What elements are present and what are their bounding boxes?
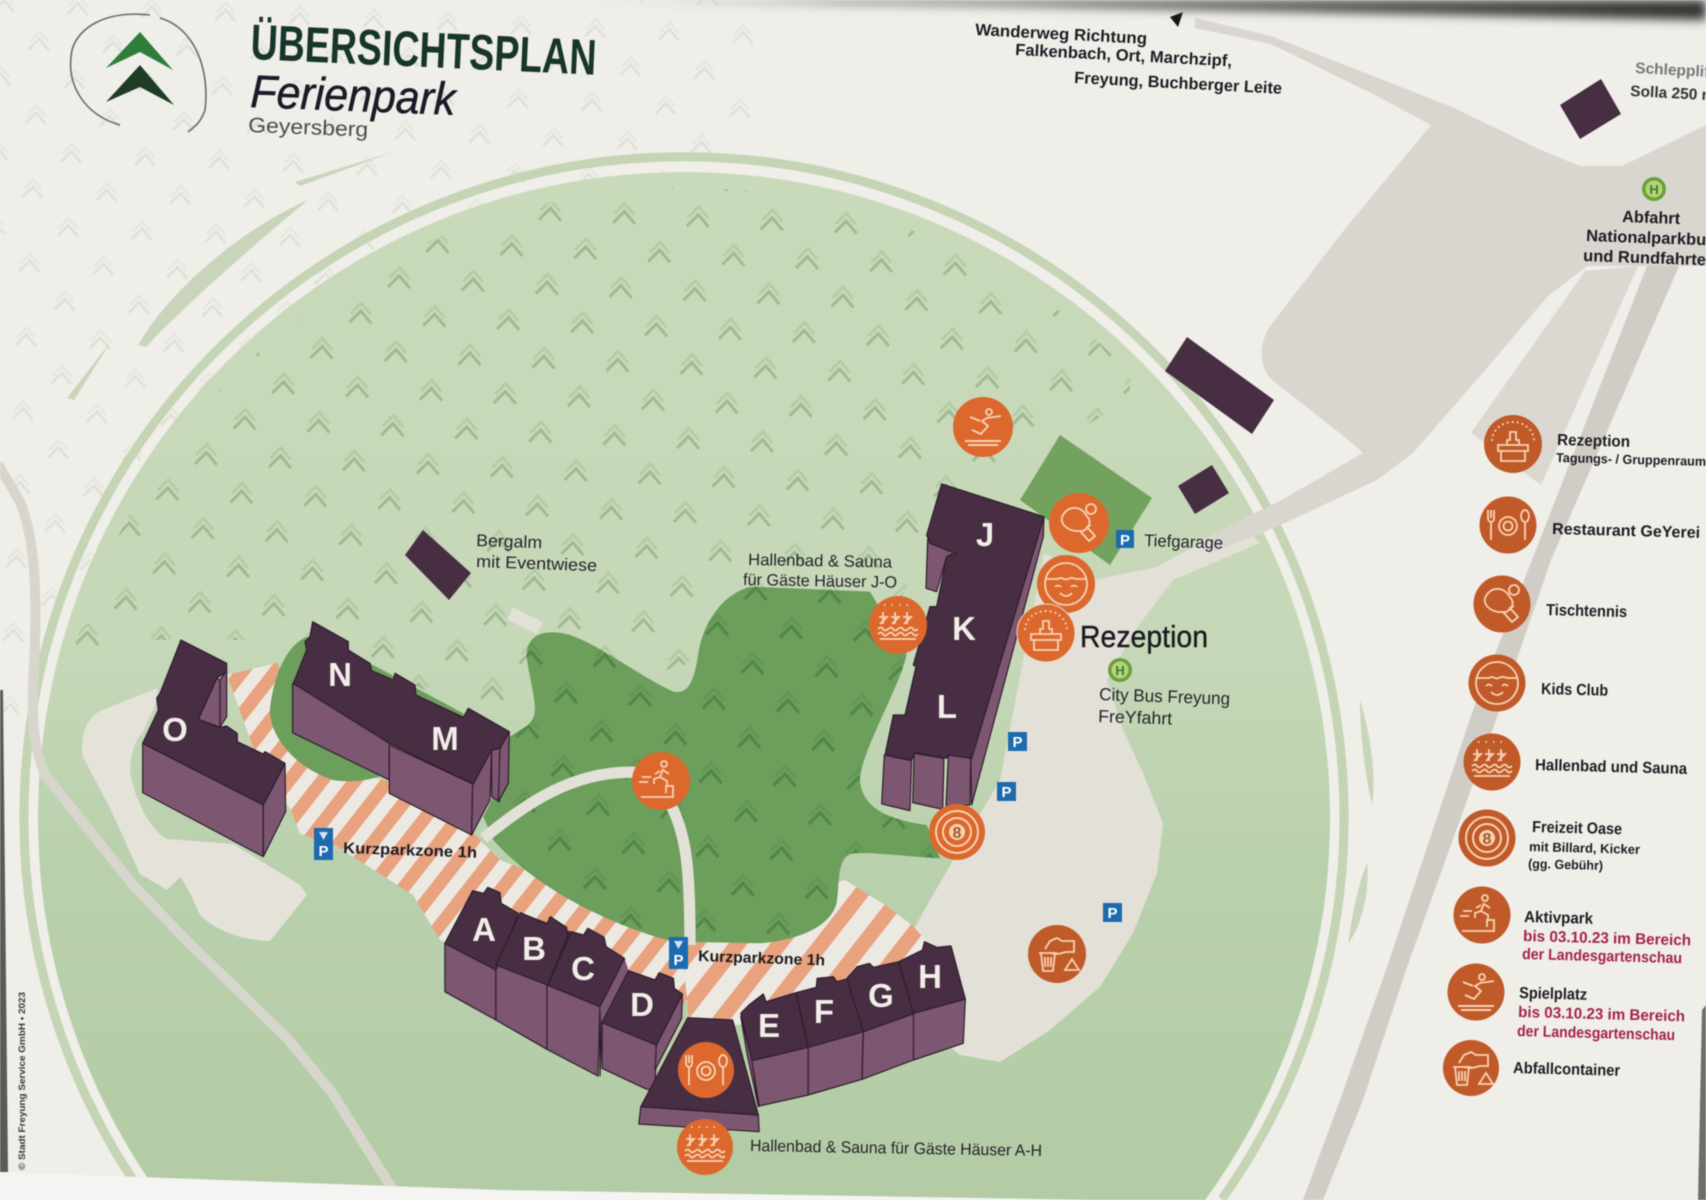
bus stop icon top bbox=[1642, 177, 1666, 201]
legend: Spielplatz: der Landesgartenschau bbox=[1517, 1023, 1675, 1044]
legend: Kids Club bbox=[1468, 654, 1609, 712]
logo bbox=[71, 14, 206, 132]
bus stop label bbox=[1583, 208, 1706, 270]
label: Bergalm: Bergalm bbox=[476, 531, 542, 552]
central meadow bbox=[483, 587, 940, 943]
icon: activity park bbox=[632, 752, 690, 810]
legend: Spielplatz: bis 03.10.23 im Bereich bbox=[1518, 1004, 1685, 1025]
icon: kids club bbox=[1037, 555, 1095, 613]
outbuilding north bbox=[1165, 337, 1274, 434]
legend: Freizeit Oase bbox=[1458, 810, 1640, 873]
parking sign 2: P bbox=[1012, 734, 1023, 751]
legend: Spielplatz: Spielplatz bbox=[1519, 985, 1587, 1004]
building letters: M bbox=[431, 720, 459, 757]
label: City Bus: City Bus Freyung bbox=[1099, 684, 1230, 709]
building letters: G bbox=[868, 977, 894, 1014]
short-term parking sign west: P bbox=[318, 843, 329, 860]
legend: Rezeption bbox=[1484, 415, 1706, 473]
map circle: outer ring bbox=[24, 157, 1344, 1199]
parking sign Tiefgarage: P bbox=[1120, 532, 1130, 549]
legend: Abfallcontainer: Abfallcontainer bbox=[1513, 1060, 1620, 1080]
parking sign 2 bbox=[1008, 732, 1027, 751]
parking sign Tiefgarage bbox=[1116, 530, 1134, 549]
parking sign 4 bbox=[1103, 903, 1122, 922]
label: Tiefgarage: Tiefgarage bbox=[1144, 531, 1223, 553]
outbuilding small bbox=[1178, 465, 1229, 514]
icon: billiard bbox=[929, 804, 985, 860]
map circle: green area bbox=[38, 172, 1330, 1200]
road: diagonal strip bbox=[1303, 266, 1679, 1200]
label: City Bus: FreYfahrt bbox=[1098, 706, 1173, 729]
outer tree pattern bbox=[0, 0, 760, 760]
green court behind N-M bbox=[270, 637, 463, 781]
label: Hallenbad A-H: Hallenbad & Sauna für Gäste Häuser A-H bbox=[750, 1137, 1042, 1160]
short-term parking sign west bbox=[314, 828, 333, 860]
bus stop icon: H bbox=[1115, 663, 1125, 678]
label: Kurzparkzone south: Kurzparkzone 1h bbox=[698, 948, 825, 969]
building letters: J bbox=[976, 516, 994, 553]
bus stop icon bbox=[1108, 658, 1132, 682]
Tiefgarage green bbox=[1020, 435, 1152, 565]
parking sign 3: P bbox=[1001, 784, 1012, 801]
label: Kurzparkzone west: Kurzparkzone 1h bbox=[343, 840, 477, 862]
legend: Aktivpark bbox=[1454, 886, 1691, 967]
hiking route label: Falkenbach, Ort, Marchzipf, bbox=[1015, 41, 1232, 70]
legend: Restaurant: Restaurant GeYerei bbox=[1552, 521, 1700, 542]
short-term parking sign south: P bbox=[673, 952, 684, 969]
building letters: N bbox=[328, 656, 352, 693]
parking hatch south bbox=[680, 880, 930, 1030]
photo edge: top bbox=[560, 0, 1706, 20]
legend panel bbox=[1443, 415, 1706, 1096]
bus stop icon top: H bbox=[1649, 182, 1659, 197]
icon: table tennis bbox=[1049, 493, 1109, 553]
paved area east with road bbox=[880, 522, 1260, 1062]
legend: Aktivpark: Aktivpark bbox=[1524, 909, 1593, 928]
building letters: D bbox=[630, 986, 654, 1023]
subtitle: Ferienpark bbox=[250, 65, 458, 125]
parking hatch west bbox=[227, 663, 690, 1030]
building letters: H bbox=[918, 958, 942, 995]
label: Bergalm bbox=[476, 531, 597, 575]
building letters: B bbox=[522, 930, 546, 967]
icon: playground bbox=[953, 397, 1013, 457]
legend: Spielplatz bbox=[1448, 964, 1685, 1044]
hiking route label bbox=[975, 21, 1282, 98]
photo edge: right bbox=[1698, 1005, 1706, 1200]
bottom paper edge bbox=[0, 1172, 1100, 1200]
hiking route label: Wanderweg Richtung bbox=[975, 21, 1147, 48]
legend: Tischtennis: Tischtennis bbox=[1546, 602, 1627, 621]
building letters: A bbox=[472, 911, 496, 948]
parking sign 4: P bbox=[1107, 905, 1118, 922]
building letters bbox=[162, 516, 994, 1044]
icon: reception bbox=[1017, 604, 1075, 662]
icon: pool south bbox=[677, 1119, 733, 1175]
road: car park and access road bbox=[1195, 18, 1706, 552]
label: Rezeption: Rezeption bbox=[1080, 619, 1208, 654]
label: Hallenbad J-O: für Gäste Häuser J-O bbox=[743, 571, 897, 592]
decorative brush strokes bbox=[67, 152, 1374, 944]
legend: Rezeption: Rezeption bbox=[1557, 432, 1630, 451]
legend: Freizeit Oase: 8 bbox=[1483, 831, 1492, 848]
building N-M bbox=[293, 622, 509, 835]
copyright note: © Stadt Freyung Service GmbH • 2023 bbox=[17, 992, 27, 1170]
building letters: F bbox=[814, 993, 834, 1030]
bus stop label: Abfahrt bbox=[1622, 208, 1681, 228]
short-term parking sign south bbox=[669, 937, 688, 969]
building letters: L bbox=[937, 688, 957, 725]
title: ÜBERSICHTSPLAN bbox=[250, 14, 598, 86]
legend: Hallenbad: Hallenbad und Sauna bbox=[1535, 757, 1687, 778]
ski lift label bbox=[1630, 60, 1706, 104]
icon: billiard: 8 bbox=[953, 825, 962, 842]
legend: Rezeption: Tagungs- / Gruppenraum bbox=[1556, 450, 1706, 469]
legend: Kids Club: Kids Club bbox=[1541, 681, 1609, 700]
icon: waste bbox=[1028, 925, 1086, 983]
building O bbox=[143, 640, 286, 857]
legend: Abfallcontainer bbox=[1443, 1040, 1620, 1096]
building J-K-L bbox=[882, 484, 1044, 811]
legend: Freizeit Oase: mit Billard, Kicker bbox=[1529, 839, 1640, 857]
legend: Hallenbad bbox=[1464, 734, 1687, 790]
path: west access road bbox=[0, 464, 393, 1190]
road: side panel bbox=[1471, 266, 1638, 485]
building letters: K bbox=[952, 610, 976, 647]
legend: Aktivpark: der Landesgartenschau bbox=[1522, 946, 1682, 967]
footpaths bbox=[483, 613, 690, 945]
photo edge: left bbox=[0, 690, 8, 1172]
icon: restaurant bbox=[678, 1042, 734, 1098]
legend: Aktivpark: bis 03.10.23 im Bereich bbox=[1523, 928, 1691, 949]
legend: Tischtennis bbox=[1474, 576, 1627, 632]
label: Bergalm: mit Eventwiese bbox=[476, 552, 597, 575]
building letters: C bbox=[571, 950, 595, 987]
legend: Freizeit Oase: (gg. Gebühr) bbox=[1528, 856, 1603, 873]
building letters: O bbox=[162, 711, 188, 748]
subtitle place: Geyersberg bbox=[248, 114, 369, 142]
building Bergalm bbox=[405, 530, 471, 600]
hiking route label: Freyung, Buchberger Leite bbox=[1074, 69, 1282, 98]
building letters: E bbox=[758, 1007, 780, 1044]
label: Hallenbad J-O: Hallenbad & Sauna bbox=[748, 551, 893, 572]
label: City Bus bbox=[1098, 684, 1230, 729]
parking sign 3 bbox=[997, 782, 1016, 801]
outbuilding top right bbox=[1560, 79, 1621, 139]
legend: Restaurant bbox=[1480, 496, 1700, 554]
label: Hallenbad J-O bbox=[743, 551, 897, 592]
legend: Freizeit Oase: Freizeit Oase bbox=[1532, 819, 1622, 838]
paved area west bbox=[82, 688, 307, 941]
arrow marker bbox=[1170, 12, 1183, 27]
icon: pool north bbox=[869, 596, 927, 654]
buildings A-D, restaurant, E-H bbox=[445, 887, 965, 1132]
